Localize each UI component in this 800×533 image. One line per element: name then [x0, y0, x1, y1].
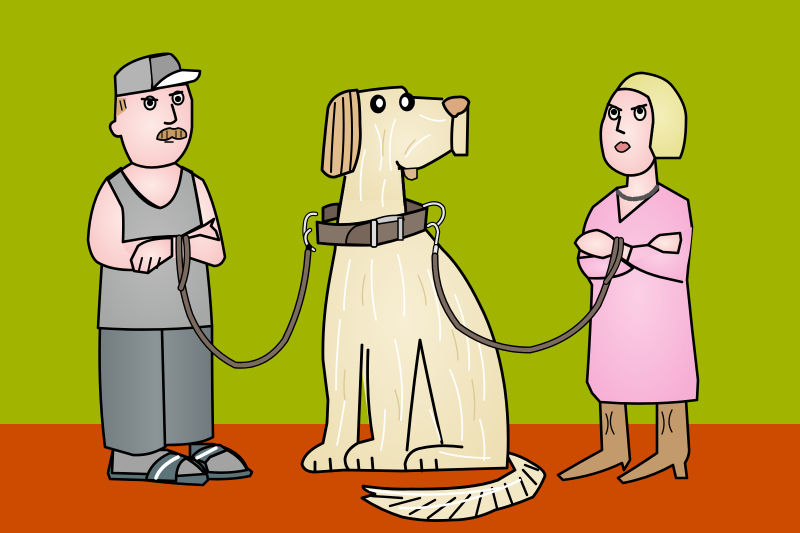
- background wall: [0, 0, 800, 424]
- woman mouth: [615, 142, 630, 152]
- man hair: [116, 98, 126, 117]
- woman right arm: [627, 227, 692, 282]
- dog head: [345, 87, 468, 200]
- woman left sleeve: [578, 255, 633, 278]
- man eyes: [144, 96, 156, 110]
- man left sandal: [108, 450, 208, 485]
- dog chin tuft: [403, 168, 417, 180]
- man mustache: [157, 128, 186, 140]
- dog eyes: [372, 96, 384, 112]
- left leash: [179, 238, 308, 365]
- man forearm: [123, 219, 219, 262]
- woman necklace: [618, 187, 657, 199]
- dog body: [302, 168, 508, 472]
- dog nose: [443, 97, 469, 117]
- woman hand: [575, 230, 618, 258]
- man right arm: [178, 167, 225, 266]
- woman: [558, 73, 698, 483]
- man cap: [115, 54, 180, 96]
- man tank top: [98, 168, 212, 330]
- dog toes: [315, 458, 437, 472]
- woman brows and nose: [608, 104, 646, 133]
- right leash: [435, 240, 621, 350]
- woman dress: [578, 183, 698, 404]
- man: [88, 54, 252, 485]
- man torso skin: [121, 163, 182, 208]
- dog: [302, 87, 545, 521]
- man right sandal: [190, 444, 252, 479]
- woman face: [601, 89, 655, 175]
- man brows and nose: [142, 92, 182, 124]
- dog tail: [362, 452, 545, 521]
- dog ear: [322, 90, 360, 177]
- man left arm: [88, 168, 162, 270]
- dog collar front: [317, 208, 427, 245]
- dog collar back: [323, 199, 427, 222]
- background floor: [0, 424, 800, 533]
- man hand: [131, 238, 172, 273]
- dog leg lines: [345, 340, 462, 471]
- woman wrist: [615, 240, 632, 262]
- dog collar clips: [305, 203, 444, 255]
- woman boots: [558, 400, 689, 483]
- woman hair back: [617, 73, 686, 158]
- dog collar buckle: [346, 215, 404, 247]
- woman right hand: [648, 233, 681, 253]
- woman neck and chest: [617, 158, 658, 222]
- man mouth: [165, 141, 173, 143]
- dog front leg gap: [359, 372, 369, 424]
- man trousers: [100, 326, 213, 455]
- woman eyes: [609, 106, 619, 120]
- man head: [110, 84, 192, 168]
- dog fur marks: [336, 115, 490, 460]
